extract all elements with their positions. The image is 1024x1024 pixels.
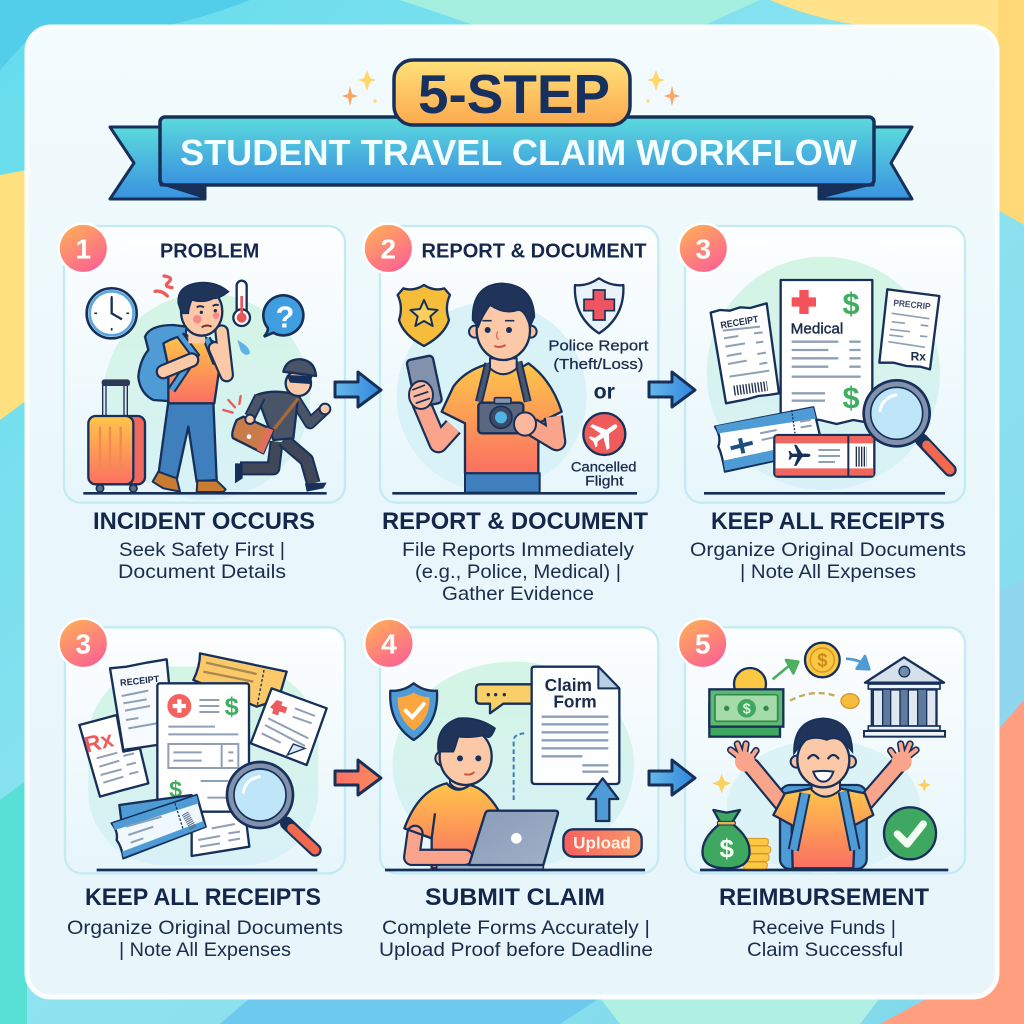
number badge 3 xyxy=(59,619,108,668)
icon: gold ticket xyxy=(193,653,287,707)
number badge 1 xyxy=(59,224,108,273)
title: 5-STEP badge with sparkles: 5-STEP xyxy=(418,63,610,125)
number badge 4 xyxy=(364,619,414,668)
icon: prescription note: PRECRIP xyxy=(893,298,931,312)
icon: thermometer xyxy=(233,281,250,326)
step 3 caption (bottom): | Note All Expenses xyxy=(119,939,291,961)
upload button xyxy=(563,829,642,857)
number badge 5 xyxy=(678,619,727,668)
icon: police badge xyxy=(398,285,450,346)
title ribbon: student travel claim workflow: STUDENT TRAVEL CLAIM WORKFLOW xyxy=(180,132,857,173)
label: cancelled flight: Cancelled xyxy=(571,460,636,475)
icon: claim form document xyxy=(532,667,619,784)
panel heading: problem: PROBLEM xyxy=(160,240,259,262)
icon: cancelled flight xyxy=(583,413,625,455)
icon: cash stack: $ xyxy=(743,702,751,718)
panel heading: report and document: REPORT & DOCUMENT xyxy=(421,240,646,262)
step 3 caption (bottom): Organize Original Documents xyxy=(67,917,343,939)
label: or: or xyxy=(594,379,615,403)
icon: blue boarding ticket xyxy=(715,407,823,472)
icon: sweat drop xyxy=(237,340,250,355)
label: police report: (Theft/Loss) xyxy=(553,356,643,373)
label: cancelled flight xyxy=(571,460,636,489)
icon: money bag and coins: $ xyxy=(719,833,734,863)
icon: prescription: Rx xyxy=(82,725,116,758)
step 2 caption: Gather Evidence xyxy=(442,583,594,605)
arrow: step 3 to 4 xyxy=(335,760,381,795)
step 2 caption: File Reports Immediately xyxy=(402,539,634,561)
step 5 caption: Receive Funds | xyxy=(752,917,896,939)
icon: green arrow up xyxy=(773,660,798,679)
panel 6: reimbursement xyxy=(678,619,965,873)
label: police report: Police Report xyxy=(548,338,649,355)
icon: success check xyxy=(884,807,936,859)
icon: clock xyxy=(87,288,137,338)
icon: bank xyxy=(864,657,945,737)
number badge 2 xyxy=(364,224,413,273)
step 3 caption (top) xyxy=(690,508,966,583)
panel 5: submit claim xyxy=(364,619,658,873)
label: police report xyxy=(548,338,649,373)
step 1 caption: Document Details xyxy=(118,561,286,583)
icon: stacked tickets xyxy=(112,795,206,858)
icon: magnifying glass xyxy=(226,761,315,850)
step 4 caption: Complete Forms Accurately | xyxy=(382,917,650,939)
step 2 caption: REPORT & DOCUMENT xyxy=(382,508,648,535)
icon: dashed coin path xyxy=(790,693,859,708)
icon: gold coin: $ xyxy=(817,650,828,671)
icon: gold coin xyxy=(805,643,840,677)
step 3 caption (top): Organize Original Documents xyxy=(690,539,966,561)
icon: medical document: $ xyxy=(842,381,860,415)
icon: suitcase xyxy=(88,379,145,492)
panel 3: keep all receipts (top) xyxy=(679,224,965,503)
icon: receipt xyxy=(110,659,175,750)
panel 1: incident occurs xyxy=(59,224,345,503)
number badge 1: 1 xyxy=(76,233,91,264)
icon: receipt xyxy=(711,303,779,403)
icon: medical note xyxy=(251,688,327,765)
icon: claim form document: Form xyxy=(553,692,597,712)
step 3 caption (top): KEEP ALL RECEIPTS xyxy=(711,508,945,535)
step 1 caption: INCIDENT OCCURS xyxy=(93,508,315,535)
label: cancelled flight: Flight xyxy=(585,474,624,489)
icon: claim form document: Claim xyxy=(545,675,592,695)
icon: prescription note: Rx xyxy=(911,350,926,364)
icon: medical document: $ xyxy=(842,287,860,321)
upload button: Upload xyxy=(573,834,631,853)
title ribbon: student travel claim workflow xyxy=(110,117,912,199)
step 2 caption xyxy=(382,508,648,605)
icon: chat bubble xyxy=(476,684,533,713)
icon: receipt: RECEIPT xyxy=(720,314,759,332)
icon: money bag and coins xyxy=(702,810,771,869)
number badge 5: 5 xyxy=(695,628,710,659)
icon: medical document xyxy=(781,280,872,424)
icon: red boarding ticket xyxy=(774,435,874,477)
step 3 caption (bottom): KEEP ALL RECEIPTS xyxy=(85,884,321,911)
number badge 3: 3 xyxy=(76,628,91,659)
icon: prescription xyxy=(79,715,148,797)
icon: receipt: RECEIPT xyxy=(120,674,160,688)
step 5 caption: REIMBURSEMENT xyxy=(719,884,929,911)
icon: medical shield xyxy=(575,278,623,333)
icon: worry marks xyxy=(155,276,172,296)
icon: medical document: $ xyxy=(169,776,182,802)
step 3 caption (bottom) xyxy=(67,884,343,961)
icon: blue arrow xyxy=(846,656,869,669)
icon: lower document xyxy=(192,812,249,856)
icon: magnifying glass xyxy=(862,379,950,470)
figure: happy student with raised arms xyxy=(731,718,916,869)
number badge 2: 2 xyxy=(381,233,396,264)
icon: prescription note xyxy=(879,289,939,369)
step 3 caption (top): | Note All Expenses xyxy=(740,561,916,583)
icon: question bubble xyxy=(263,295,303,337)
step 5 caption xyxy=(719,884,929,961)
title: 5-STEP badge with sparkles xyxy=(342,60,680,125)
step 2 caption: (e.g., Police, Medical) | xyxy=(415,561,621,583)
panel 2: report and document xyxy=(364,224,658,503)
arrow: step 1 to 2 xyxy=(335,372,381,407)
icon: question bubble: ? xyxy=(276,300,294,334)
step 1 caption xyxy=(93,508,315,583)
step 5 caption: Claim Successful xyxy=(747,939,903,961)
icon: sparkles xyxy=(712,774,931,793)
step 4 caption xyxy=(379,884,653,961)
panel 4: keep all receipts (bottom) xyxy=(59,619,345,873)
arrow: step 2 to 3 xyxy=(649,372,695,407)
figure: student at laptop xyxy=(404,718,558,869)
icon: cash stack xyxy=(709,668,783,737)
step 1 caption: Seek Safety First | xyxy=(119,539,285,561)
icon: medical document: $ xyxy=(225,693,239,721)
step 4 caption: Upload Proof before Deadline xyxy=(379,939,653,961)
icon: medical document: Medical xyxy=(791,321,843,337)
number badge 3 xyxy=(679,224,728,273)
icon: upload arrow xyxy=(587,778,618,821)
figure: worried student xyxy=(138,283,228,492)
arrow: step 4 to 5 xyxy=(649,760,695,795)
figure: student with phone and camera xyxy=(406,283,562,493)
number badge 3: 3 xyxy=(696,233,711,264)
icon: medical document xyxy=(157,683,249,812)
icon: dotted upload path xyxy=(514,733,527,800)
icon: check shield xyxy=(390,683,437,740)
step 4 caption: SUBMIT CLAIM xyxy=(425,884,605,911)
number badge 4: 4 xyxy=(381,628,397,659)
figure: running thief with bag xyxy=(223,359,330,492)
